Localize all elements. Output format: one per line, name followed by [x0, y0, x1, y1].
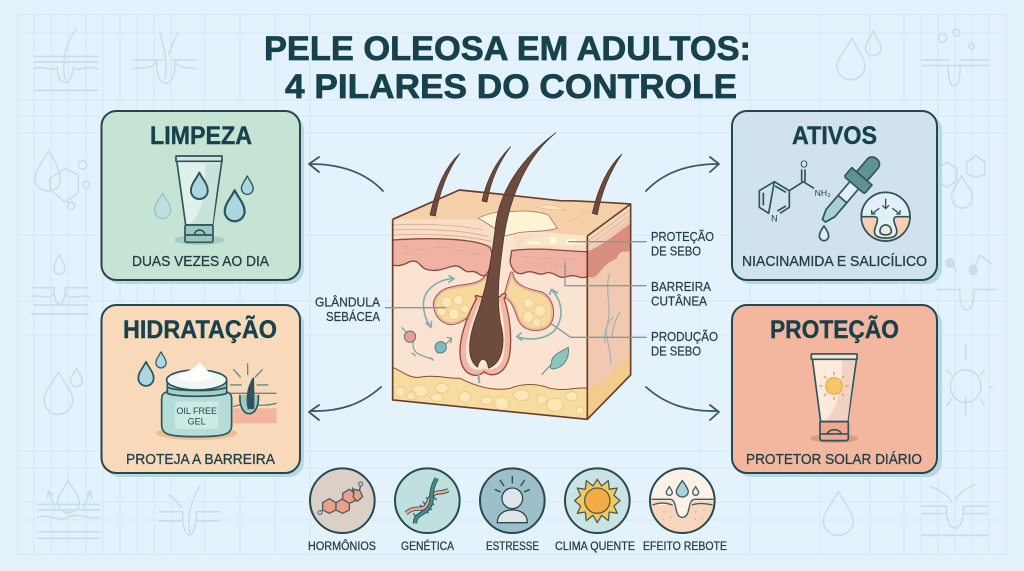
- title: [264, 30, 751, 106]
- icon: dna helix: [395, 468, 460, 533]
- icon: niacinamide molecule, dropper and pore: O: [800, 159, 808, 170]
- factor: estresse: [480, 468, 545, 553]
- text: duas vezes ao dia: DUAS VEZES AO DIA: [132, 253, 269, 270]
- background icons: right column: [823, 29, 997, 535]
- factor: estresse: ESTRESSE: [486, 541, 539, 553]
- label: produção de sebo: [651, 330, 718, 358]
- icon: niacinamide molecule, dropper and pore: NH₃: [815, 188, 831, 198]
- skin cross-section diagram: [385, 133, 647, 419]
- panel: limpeza: [102, 111, 304, 284]
- label: proteção de sebo: [651, 230, 714, 258]
- label: glândula sebácea: SEBÁCEA: [326, 309, 381, 324]
- factor: efeito rebote: [643, 468, 727, 553]
- factor: efeito rebote: EFEITO REBOTE: [643, 541, 727, 553]
- panel: ativos: [732, 111, 942, 284]
- icon: gel jar and follicle: [138, 352, 277, 440]
- label: barreira cutânea: BARREIRA: [651, 280, 712, 294]
- icon: sunscreen tube: [810, 354, 858, 443]
- label: proteção de sebo: PROTEÇÃO: [651, 230, 714, 244]
- icon: rebound oily pore: [650, 468, 715, 533]
- label: produção de sebo: DE SEBO: [651, 344, 701, 358]
- background icons: left column: [32, 28, 220, 538]
- icon: sun: [565, 468, 630, 533]
- arrow: skin to limpeza: [309, 157, 383, 191]
- icon: stressed person: [480, 468, 545, 533]
- label: glândula sebácea: [315, 294, 381, 324]
- factor: hormônios: [308, 468, 376, 553]
- title: PELE OLEOSA EM ADULTOS:: [264, 30, 751, 68]
- factor: hormônios: HORMÔNIOS: [308, 540, 376, 553]
- label: proteção de sebo: DE SEBO: [651, 244, 701, 258]
- factor: clima quente: CLIMA QUENTE: [555, 541, 635, 553]
- panel: ativos: ATIVOS: [792, 122, 877, 150]
- factor: genética: GENÉTICA: [401, 540, 454, 553]
- text: niacinamida e salicílico: NIACINAMIDA E SALICÍLICO: [742, 253, 927, 270]
- label: produção de sebo: PRODUÇÃO: [651, 330, 718, 344]
- icon: gel jar and follicle: GEL: [188, 416, 206, 426]
- factor: clima quente: [555, 468, 635, 553]
- panel: limpeza: LIMPEZA: [150, 122, 252, 150]
- icon: cleanser tube with drops: [155, 156, 253, 245]
- icon: gel jar and follicle: OIL FREE: [176, 406, 217, 416]
- panel: proteção: [732, 305, 942, 477]
- arrow: skin to proteção: [646, 387, 719, 420]
- arrow: skin to hidratação: [309, 387, 381, 420]
- label: barreira cutânea: [651, 280, 712, 308]
- icon: niacinamide molecule, dropper and pore: [759, 150, 910, 241]
- text: protetor solar diário: PROTETOR SOLAR DIÁRIO: [746, 451, 922, 468]
- title: 4 PILARES DO CONTROLE: [285, 68, 737, 106]
- panel: hidratação: [102, 305, 304, 477]
- label: glândula sebácea: GLÂNDULA: [315, 294, 381, 310]
- label: barreira cutânea: CUTÂNEA: [651, 294, 708, 308]
- icon: niacinamide molecule, dropper and pore: N: [771, 214, 778, 224]
- icon: hormone molecule: [310, 468, 375, 533]
- panel: hidratação: HIDRATAÇÃO: [123, 314, 277, 344]
- panel: proteção: PROTEÇÃO: [770, 314, 899, 344]
- text: proteja a barreira: PROTEJA A BARREIRA: [126, 451, 275, 468]
- arrow: skin to ativos: [646, 157, 719, 191]
- factor: genética: [395, 468, 460, 553]
